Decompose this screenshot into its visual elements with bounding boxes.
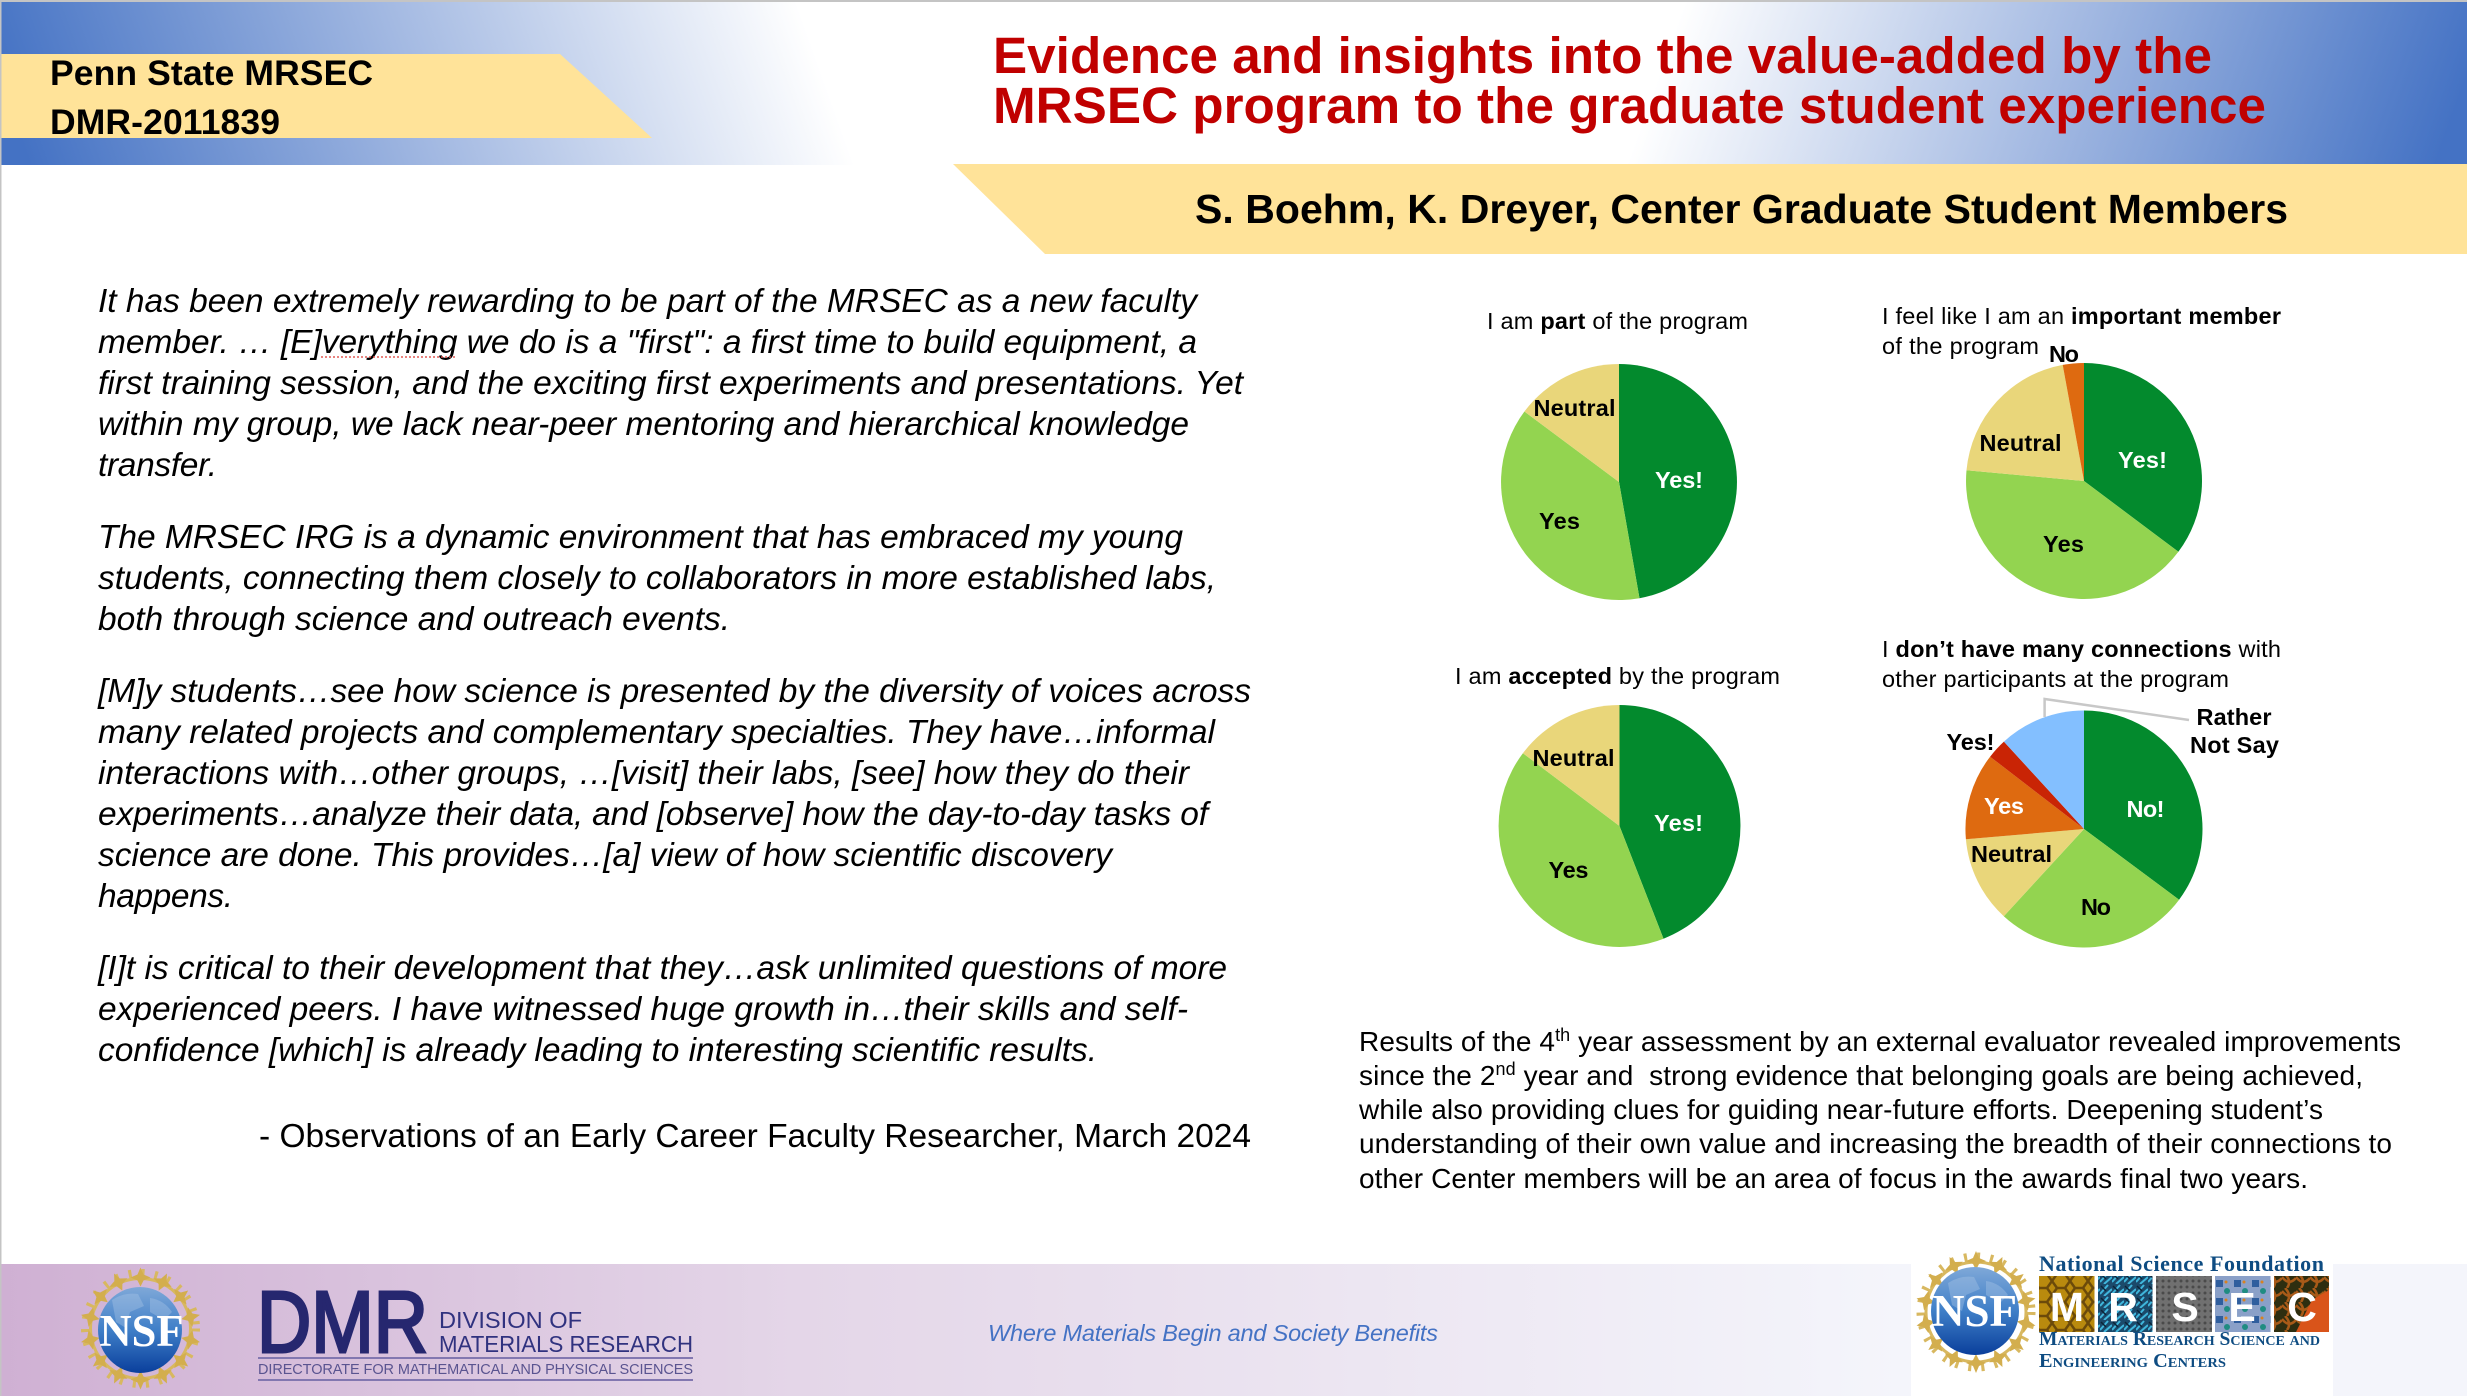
pie chart: accepted by the program: Yes — [1548, 857, 1588, 883]
header band: left — [2, 2, 900, 165]
quote text block — [97, 283, 1251, 1069]
pie chart: connections — [1882, 636, 2281, 947]
footer tagline: Where Materials Begin and Society Benefits — [988, 1320, 1438, 1346]
logo: DMR division of materials research: DIRECTORATE FOR MATHEMATICAL AND PHYSICAL SCIENCES — [258, 1362, 693, 1378]
pie chart: accepted by the program — [1455, 663, 1780, 947]
authors: S. Boehm, K. Dreyer, Center Graduate Student Members — [1195, 186, 2288, 232]
results summary text: since the 2 — [1359, 1060, 1495, 1091]
logo: MRSEC: S — [2171, 1284, 2199, 1330]
quote attribution: - Observations of an Early Career Faculty Researcher, March 2024 — [259, 1118, 1251, 1155]
results summary text — [1358, 1025, 2401, 1194]
icon: NSF logo right: NSF — [1932, 1286, 2017, 1336]
pie chart: connections: Neutral — [1971, 841, 2052, 867]
pie chart: connections: Not Say — [2190, 732, 2279, 758]
pie chart: important member: Neutral — [1980, 430, 2062, 456]
quote text block: The MRSEC IRG is a dynamic environment that has embraced my young — [98, 519, 1183, 556]
pie chart: connections: Yes! — [1946, 729, 1994, 755]
pie chart: important member: Yes — [2043, 531, 2084, 557]
quote text block: students, connecting them closely to collaborators in more established labs, — [98, 560, 1216, 597]
results summary text: understanding of their own value and increasing the breadth of their connections to — [1359, 1128, 2392, 1159]
pie chart: part of the program — [1487, 308, 1748, 600]
logo: MRSEC: Materials Research Science and — [2039, 1329, 2320, 1350]
pie chart: part of the program: Yes! — [1655, 467, 1703, 493]
results summary text: th — [1555, 1025, 1570, 1045]
pie chart: connections: No — [2081, 894, 2111, 920]
quote text block: first training session, and the exciting first experiments and presentations. Yet — [98, 365, 1245, 402]
results summary text: nd — [1496, 1059, 1516, 1079]
header band: right — [953, 2, 2467, 254]
chart title: of the program — [1882, 333, 2039, 359]
chart title: other participants at the program — [1882, 666, 2229, 692]
pie chart: important member: Yes! — [2118, 447, 2167, 473]
results summary text: year and strong evidence that belonging goals are being achieved, — [1516, 1060, 2363, 1091]
logo: MRSEC: E — [2228, 1284, 2256, 1330]
chart title: I don’t have many connections with — [1882, 636, 2281, 662]
pie chart: important member: No — [2049, 341, 2079, 367]
pie chart: connections: No! — [2126, 796, 2164, 822]
results summary text: Results of the 4 — [1359, 1026, 1555, 1057]
logo: DMR division of materials research: DMR — [257, 1274, 428, 1371]
chart title — [1882, 303, 2281, 359]
pie chart: accepted by the program: Neutral — [1532, 745, 1614, 771]
results summary text: while also providing clues for guiding near-future efforts. Deepening student’s — [1358, 1094, 2323, 1125]
logo: DMR division of materials research: DIVISION OF — [439, 1307, 582, 1333]
pie chart: accepted by the program: Yes! — [1654, 810, 1703, 836]
quote text block: member. … [E]verything we do is a "first": a first time to build equipment, a — [98, 324, 1197, 361]
pie chart: connections: Yes — [1984, 793, 2024, 819]
logo: MRSEC: C — [2287, 1284, 2317, 1330]
quote text block: science are done. This provides…[a] view of how scientific discovery — [98, 837, 1114, 874]
center name: Penn State MRSEC — [50, 53, 373, 93]
icon: NSF logo left: NSF — [100, 1306, 184, 1356]
quote text block: [M]y students…see how science is presented by the diversity of voices across — [97, 673, 1251, 710]
chart title: I am part of the program — [1487, 308, 1748, 334]
quote text block: confidence [which] is already leading to interesting scientific results. — [98, 1032, 1097, 1069]
icon: NSF logo right — [1914, 1251, 2038, 1373]
quote text block: experiments…analyze their data, and [observe] how the day-to-day tasks of — [98, 796, 1212, 833]
title: Evidence and insights into the value-added by the — [993, 27, 2212, 84]
logo: MRSEC: National Science Foundation — [2039, 1251, 2324, 1276]
award number: DMR-2011839 — [50, 102, 280, 142]
quote text block: many related projects and complementary specialties. They have…informal — [98, 714, 1217, 751]
quote text block: both through science and outreach events. — [98, 601, 730, 638]
logo: DMR division of materials research — [257, 1274, 693, 1381]
logo: MRSEC: R — [2108, 1284, 2138, 1330]
quote text block: [I]t is critical to their development that they…ask unlimited questions of more — [97, 950, 1227, 987]
logo: MRSEC — [2039, 1251, 2329, 1372]
chart title — [1882, 636, 2281, 692]
pie chart: connections: Rather — [2196, 704, 2272, 730]
quote text block: interactions with…other groups, …[visit] their labs, [see] how they do their — [98, 755, 1191, 792]
quote text block: experienced peers. I have witnessed huge growth in…their skills and self- — [98, 991, 1188, 1028]
icon: NSF logo left — [79, 1268, 202, 1390]
results summary text: other Center members will be an area of focus in the awards final two years. — [1359, 1163, 2308, 1194]
pie chart: important member — [1882, 303, 2281, 599]
quote text block: It has been extremely rewarding to be part of the MRSEC as a new faculty — [98, 283, 1199, 320]
logo: DMR division of materials research: MATERIALS RESEARCH — [439, 1331, 693, 1357]
pie chart: part of the program: Neutral — [1534, 395, 1616, 421]
quote text block: transfer. — [98, 447, 217, 484]
footer band — [2, 1250, 2467, 1396]
title — [993, 27, 2266, 134]
quote text block: happens. — [98, 878, 233, 915]
chart title: I am accepted by the program — [1455, 663, 1780, 689]
quote text block: within my group, we lack near-peer mentoring and hierarchical knowledge — [98, 406, 1189, 443]
pie chart: part of the program: Yes — [1539, 508, 1580, 534]
logo: MRSEC: M — [2050, 1284, 2084, 1330]
results summary text: year assessment by an external evaluator revealed improvements — [1570, 1026, 2401, 1057]
chart title: I feel like I am an important member — [1882, 303, 2281, 329]
title: MRSEC program to the graduate student experience — [993, 77, 2266, 134]
logo: MRSEC: Engineering Centers — [2039, 1351, 2226, 1372]
